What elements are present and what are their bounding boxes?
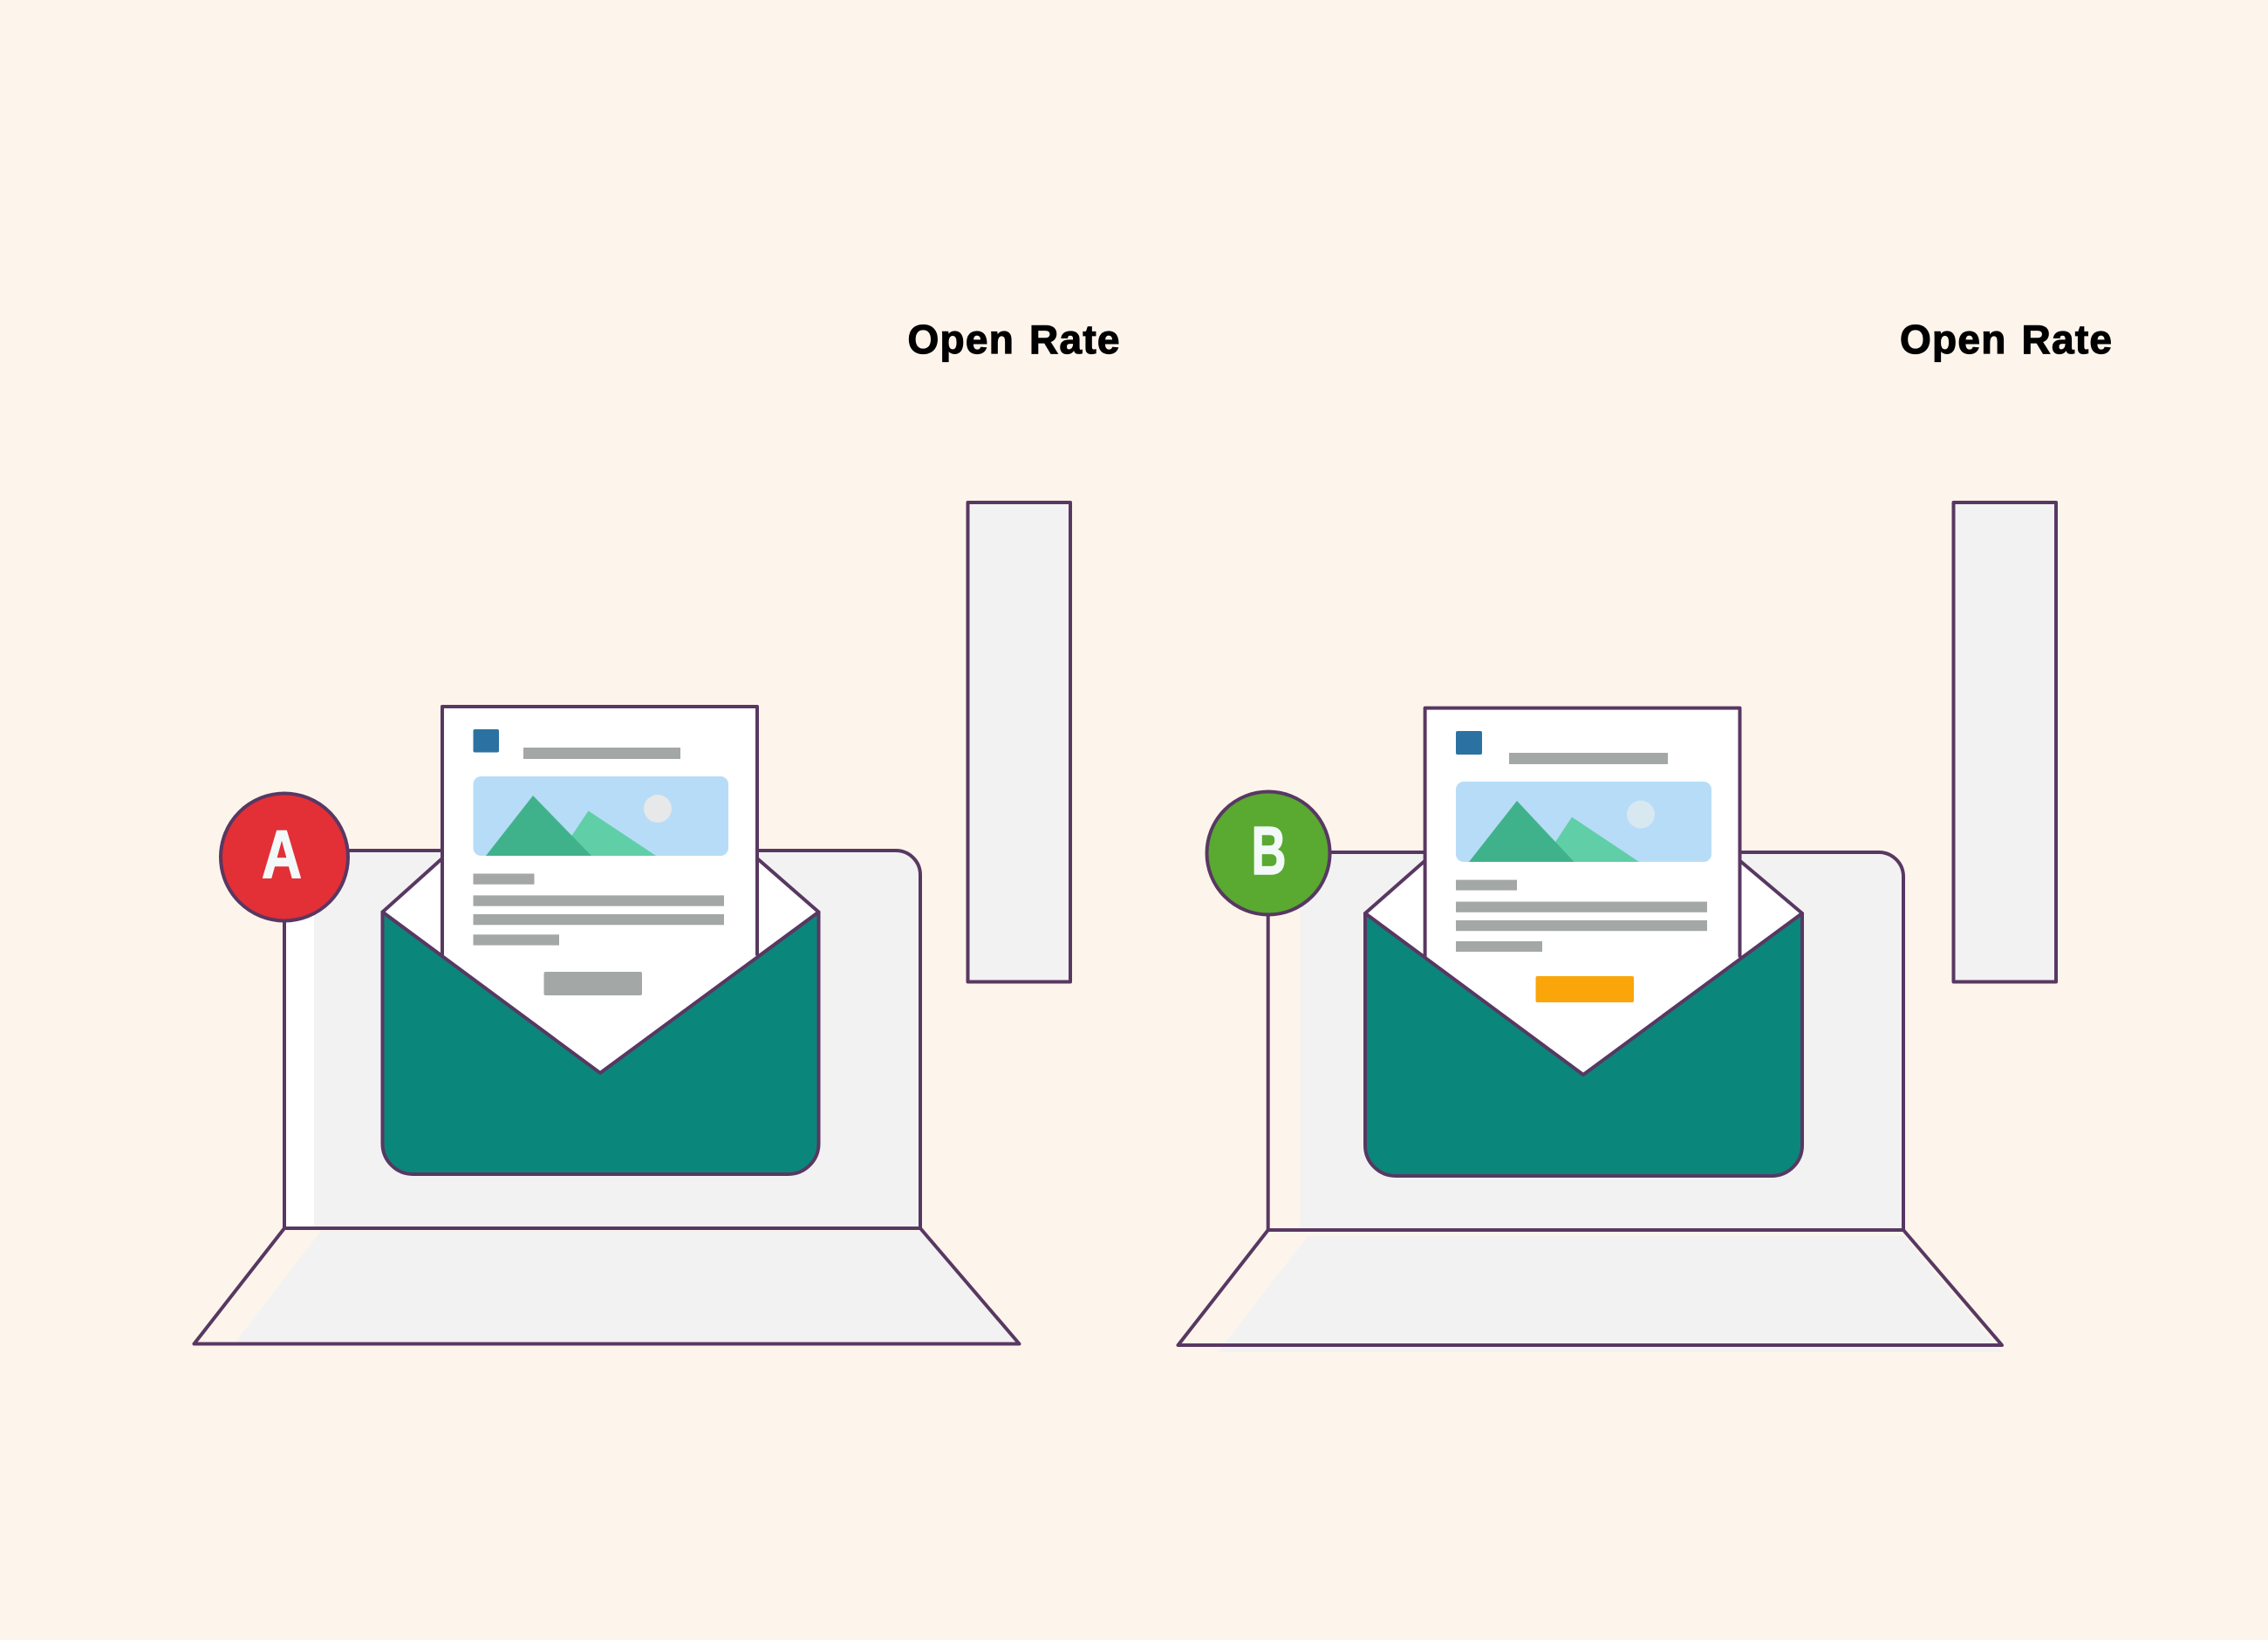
heading: open rate A: Open Rate xyxy=(907,317,1120,362)
badge B xyxy=(1207,792,1329,914)
envelope front A xyxy=(382,912,818,1174)
empty bar A xyxy=(968,502,1070,982)
badge A: A xyxy=(262,816,302,892)
body text lines A xyxy=(473,874,724,946)
call to action button A xyxy=(544,972,642,995)
header line A xyxy=(523,748,680,759)
panel: version A xyxy=(194,317,1120,1343)
envelope back flap B xyxy=(1365,861,1802,1075)
laptop B xyxy=(1178,852,2002,1352)
email document B xyxy=(1425,708,1739,1075)
email document A xyxy=(442,707,757,1073)
body text lines B xyxy=(1456,880,1707,952)
hero image B xyxy=(1456,782,1711,862)
hero image A xyxy=(473,776,728,856)
badge B: B xyxy=(1251,812,1286,889)
badge A xyxy=(221,794,348,921)
envelope back flap A xyxy=(382,858,818,1073)
logo B xyxy=(1456,731,1482,755)
header line B xyxy=(1509,753,1668,764)
heading: open rate B: Open Rate xyxy=(1900,317,2112,362)
empty bar B xyxy=(1954,502,2056,982)
envelope front B xyxy=(1365,913,1802,1176)
logo A xyxy=(473,729,499,752)
panel: version B xyxy=(1178,317,2112,1352)
laptop A xyxy=(194,851,1019,1343)
call to action button B xyxy=(1535,976,1634,1002)
